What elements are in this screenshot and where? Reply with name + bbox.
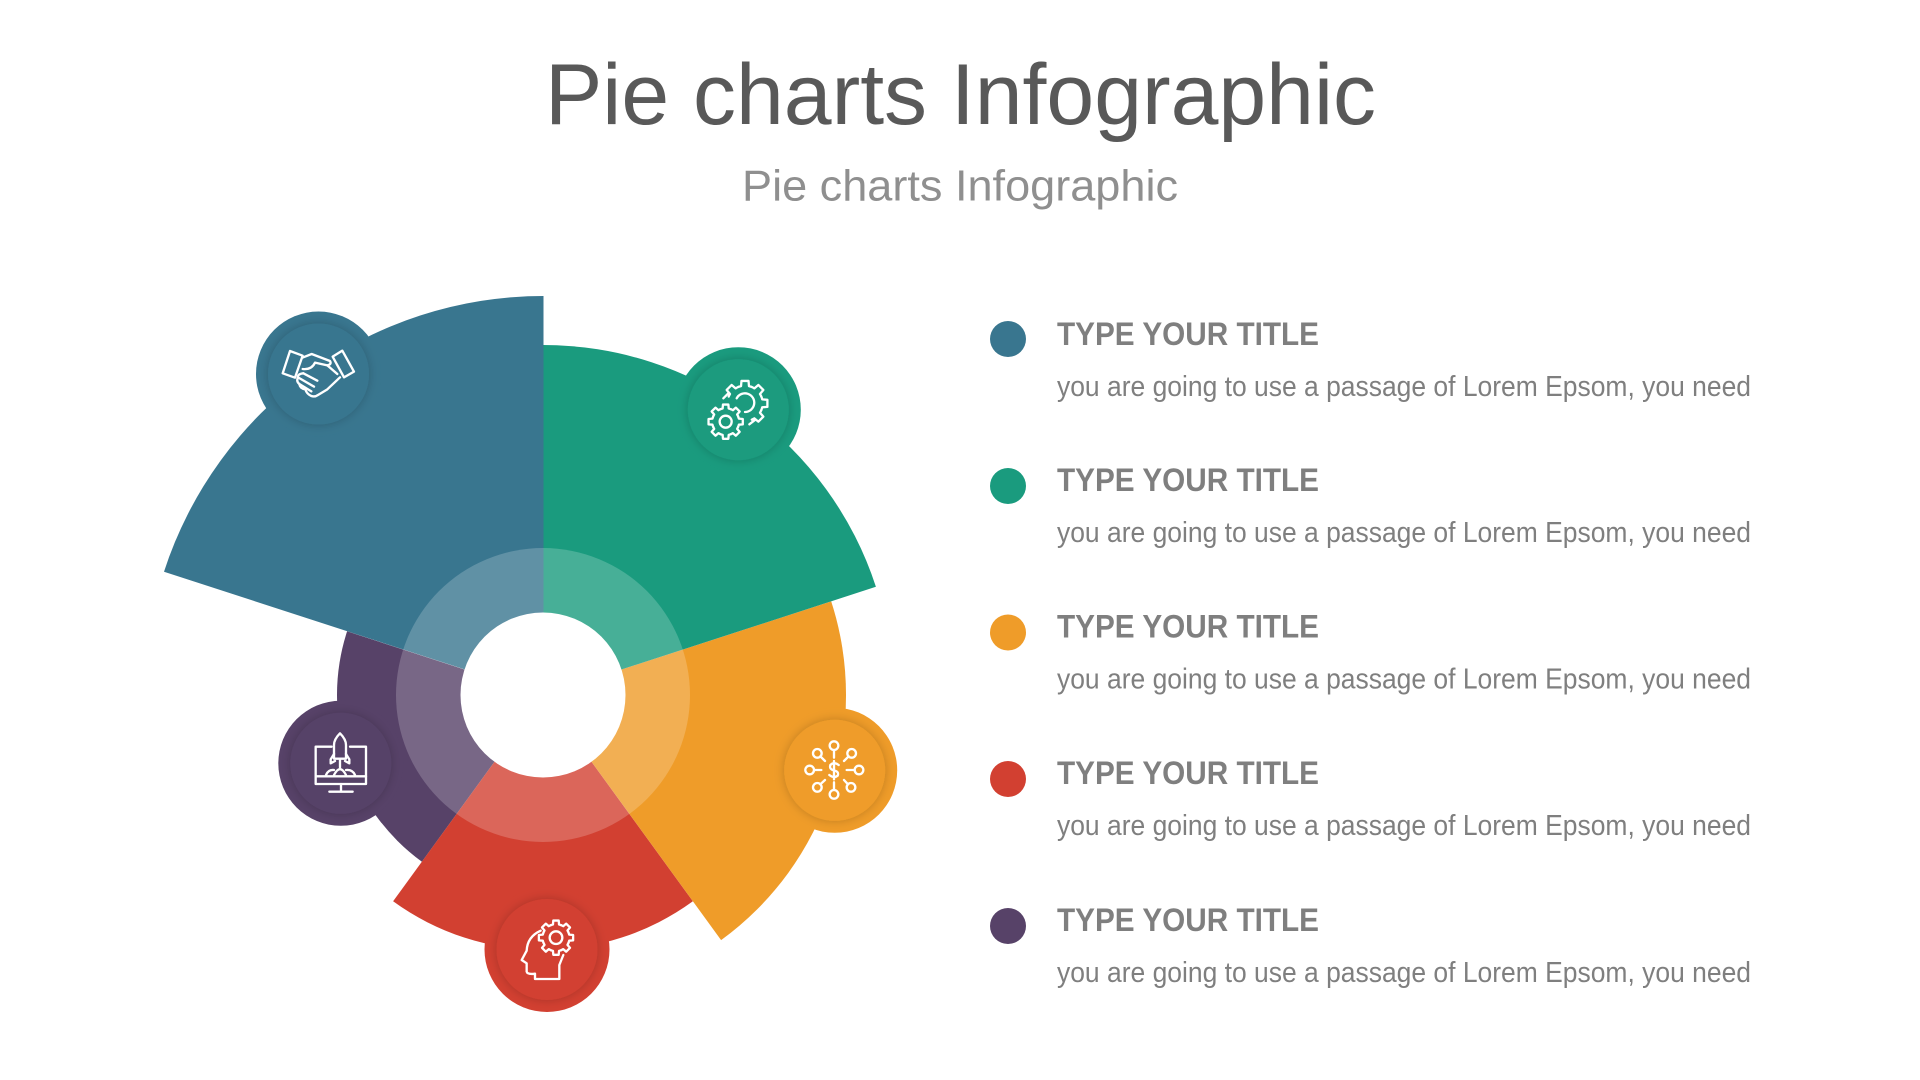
slice: green [543, 345, 876, 695]
center hole [460, 612, 626, 778]
icon: head with gear [522, 921, 573, 979]
badge: rocket launch monitor [278, 701, 403, 826]
slice: orange [543, 601, 846, 940]
legend item 3: you are going to use a passage of Lorem Epsom, you need [1057, 664, 1751, 696]
badge: handshake [256, 312, 381, 436]
legend item 3 [990, 608, 1751, 696]
legend item 3: TYPE YOUR TITLE [1057, 608, 1319, 644]
badge: money network [772, 708, 897, 833]
icon: rocket launch monitor [316, 733, 366, 792]
legend item 1: you are going to use a passage of Lorem Epsom, you need [1057, 371, 1751, 403]
legend item 5 [990, 902, 1751, 989]
legend [990, 316, 1751, 989]
legend item 2: you are going to use a passage of Lorem Epsom, you need [1057, 517, 1751, 549]
icon: gears [709, 381, 767, 439]
legend item 2: TYPE YOUR TITLE [1057, 462, 1319, 498]
legend item 5: you are going to use a passage of Lorem Epsom, you need [1057, 957, 1751, 989]
legend item 5: TYPE YOUR TITLE [1057, 902, 1319, 938]
icon: money network [805, 741, 863, 799]
slice: red [393, 695, 693, 950]
badge: gears [676, 347, 801, 472]
legend item 4: you are going to use a passage of Lorem Epsom, you need [1057, 810, 1751, 842]
subtitle: Pie charts Infographic [742, 162, 1178, 210]
icon: handshake [283, 351, 354, 396]
legend item 1: TYPE YOUR TITLE [1057, 316, 1319, 352]
legend item 4: TYPE YOUR TITLE [1057, 755, 1319, 791]
slice: purple [337, 631, 543, 862]
slice: blue [164, 296, 544, 695]
title: Pie charts Infographic [545, 47, 1376, 143]
legend item 4 [990, 755, 1751, 842]
badge: head with gear [484, 887, 610, 1012]
legend item 1 [990, 316, 1751, 403]
translucent inner ring [396, 548, 690, 842]
legend item 2 [990, 462, 1751, 549]
pie chart [164, 296, 897, 1012]
